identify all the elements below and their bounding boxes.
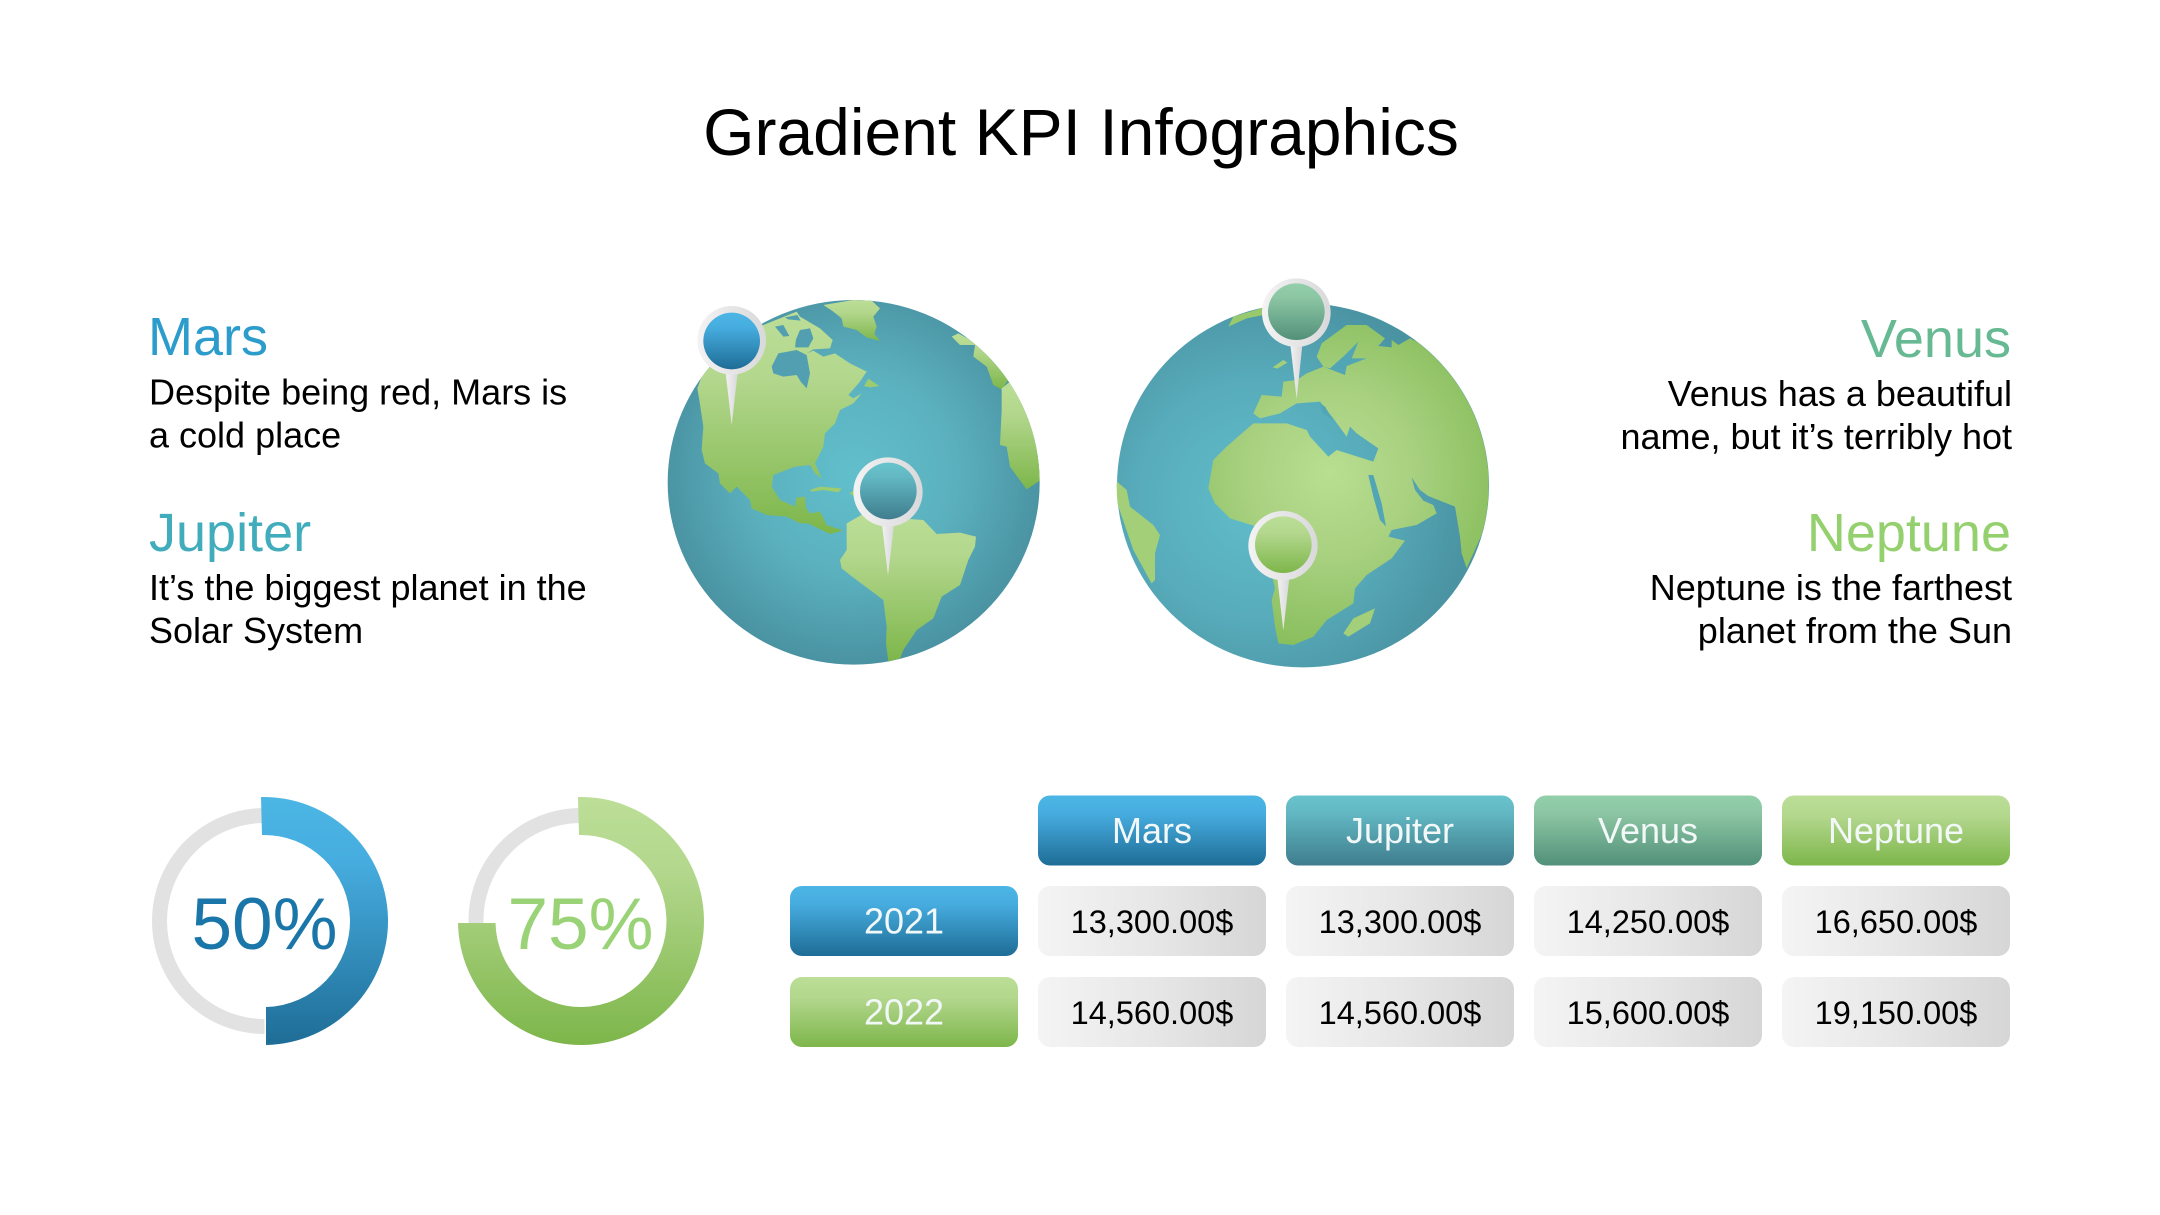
heading: Jupiter: Jupiter bbox=[149, 503, 311, 563]
text block: Venus bbox=[1620, 309, 2012, 457]
cell: Jupiter 2022: 14,560.00$ bbox=[1319, 995, 1481, 1031]
header: Neptune: Neptune bbox=[1828, 810, 1964, 851]
donut chart: 50% bbox=[160, 797, 388, 1045]
continent: Greenland bbox=[823, 300, 880, 341]
description: Jupiter: It’s the biggest planet in the bbox=[149, 567, 587, 608]
cell: Mars 2021 bbox=[1038, 886, 1266, 956]
title: Gradient KPI Infographics bbox=[703, 95, 1459, 169]
islands: Newfoundland and Caribbean bbox=[810, 379, 879, 496]
map pin: Venus bbox=[1262, 278, 1331, 399]
value: 75%: 75% bbox=[507, 884, 654, 965]
globe: Americas bbox=[668, 300, 1043, 665]
donut arc: 50% progress bbox=[261, 797, 388, 1045]
description: Jupiter: Solar System bbox=[149, 610, 363, 651]
islands: Britain and Madagascar bbox=[1273, 360, 1375, 637]
row label: 2021 bbox=[790, 886, 1018, 956]
description: Venus: Venus has a beautiful bbox=[1668, 373, 2012, 414]
cell: Venus 2022: 15,600.00$ bbox=[1567, 995, 1729, 1031]
table bbox=[790, 796, 2010, 1047]
description: Neptune: Neptune is the farthest bbox=[1650, 567, 2012, 608]
continent: Greenland edge bbox=[1228, 308, 1263, 327]
globe: Europe and Africa bbox=[1115, 278, 1493, 667]
continent: South America edge bbox=[1115, 480, 1160, 583]
header: Mars bbox=[1038, 796, 1266, 866]
text block: Jupiter bbox=[149, 503, 587, 651]
header: Venus: Venus bbox=[1598, 810, 1698, 851]
continent: Europe edge bbox=[952, 333, 1008, 389]
cell: Venus 2022 bbox=[1534, 977, 1762, 1047]
cell: Mars 2022 bbox=[1038, 977, 1266, 1047]
cell: Mars 2022: 14,560.00$ bbox=[1071, 995, 1233, 1031]
header: Jupiter bbox=[1286, 796, 1514, 866]
cell: Neptune 2021: 16,650.00$ bbox=[1815, 904, 1977, 940]
map pin: Neptune bbox=[1248, 511, 1318, 631]
text block: Mars bbox=[148, 307, 567, 456]
continent: Africa edge bbox=[1000, 382, 1043, 489]
cell: Jupiter 2022 bbox=[1286, 977, 1514, 1047]
row label: 2022: 2022 bbox=[864, 992, 944, 1032]
donut chart: 75% bbox=[458, 797, 704, 1045]
continent: Eurasia and Africa bbox=[1208, 325, 1493, 645]
description: Neptune: planet from the Sun bbox=[1698, 610, 2012, 651]
continent: South America bbox=[840, 510, 976, 662]
text block: Neptune bbox=[1650, 503, 2012, 651]
map pin: Mars bbox=[697, 306, 766, 425]
header: Mars: Mars bbox=[1112, 810, 1192, 851]
row label: 2022 bbox=[790, 977, 1018, 1047]
cell: Mars 2021: 13,300.00$ bbox=[1071, 904, 1233, 940]
heading: Neptune: Neptune bbox=[1807, 503, 2011, 563]
map pin: Jupiter bbox=[853, 457, 923, 576]
header: Venus bbox=[1534, 796, 1762, 866]
value: 50%: 50% bbox=[191, 884, 338, 965]
heading: Mars: Mars bbox=[148, 307, 268, 367]
cell: Neptune 2022 bbox=[1782, 977, 2010, 1047]
cell: Jupiter 2021 bbox=[1286, 886, 1514, 956]
seas: Baltic, Red Sea and Adriatic bbox=[1320, 342, 1386, 527]
continent: North America bbox=[697, 312, 867, 534]
cell: Venus 2021 bbox=[1534, 886, 1762, 956]
description: Mars: Despite being red, Mars is bbox=[149, 372, 567, 412]
cell: Neptune 2022: 19,150.00$ bbox=[1815, 995, 1977, 1031]
description: Venus: name, but it’s terribly hot bbox=[1620, 416, 2012, 457]
heading: Venus: Venus bbox=[1861, 309, 2011, 369]
header: Neptune bbox=[1782, 796, 2010, 866]
cell: Venus 2021: 14,250.00$ bbox=[1567, 904, 1729, 940]
donut arc: 75% progress bbox=[458, 797, 704, 1045]
description: Mars: a cold place bbox=[149, 414, 341, 456]
row label: 2021: 2021 bbox=[864, 900, 944, 942]
header: Jupiter: Jupiter bbox=[1346, 810, 1454, 851]
cell: Neptune 2021 bbox=[1782, 886, 2010, 956]
cell: Jupiter 2021: 13,300.00$ bbox=[1319, 904, 1481, 940]
sea: Hudson Bay and arctic channels bbox=[772, 315, 813, 388]
